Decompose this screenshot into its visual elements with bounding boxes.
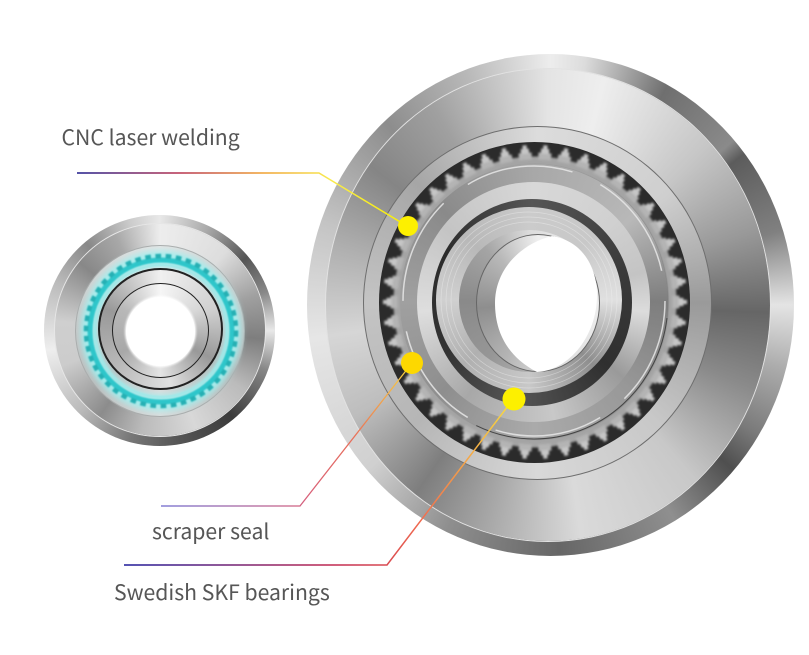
small wheel outer bevel [44,215,275,446]
small wheel bearing outer ring [98,268,223,390]
large wheel [307,54,794,556]
bearing cage [400,164,668,439]
race thread lines [440,212,617,388]
label: scraper seal: scraper seal [152,515,269,546]
marker dot: SKF bearings [502,388,526,410]
marker dot: scraper seal [401,352,423,374]
dark tooth cavity [379,142,690,463]
centre hole [495,236,597,372]
label: CNC laser welding: CNC laser welding [62,121,240,152]
small wheel groove ring [75,245,245,417]
small wheel centre hole [126,297,195,366]
small wheel face [55,224,265,436]
marker dot: laser welding [398,216,418,236]
leader line: CNC laser welding [77,173,407,226]
label: Swedish SKF bearings: Swedish SKF bearings [114,576,330,607]
raised ring around teeth [363,126,712,480]
leader line: scraper seal [161,363,412,506]
inner bearing ring [417,182,650,422]
cage highlight arcs [402,165,668,440]
leader line: Swedish SKF bearings [124,398,514,565]
dark seal groove [432,199,632,406]
small wheel teal ring [78,248,246,414]
inner sleeve [459,230,600,372]
small wheel inner race [112,283,209,378]
wheel face [326,69,770,541]
threaded race [436,207,622,393]
gear teeth [382,144,688,460]
small wheel with teal highlighted seal [44,215,275,446]
outer bevel [307,54,794,556]
inner sleeve bore [476,234,600,372]
